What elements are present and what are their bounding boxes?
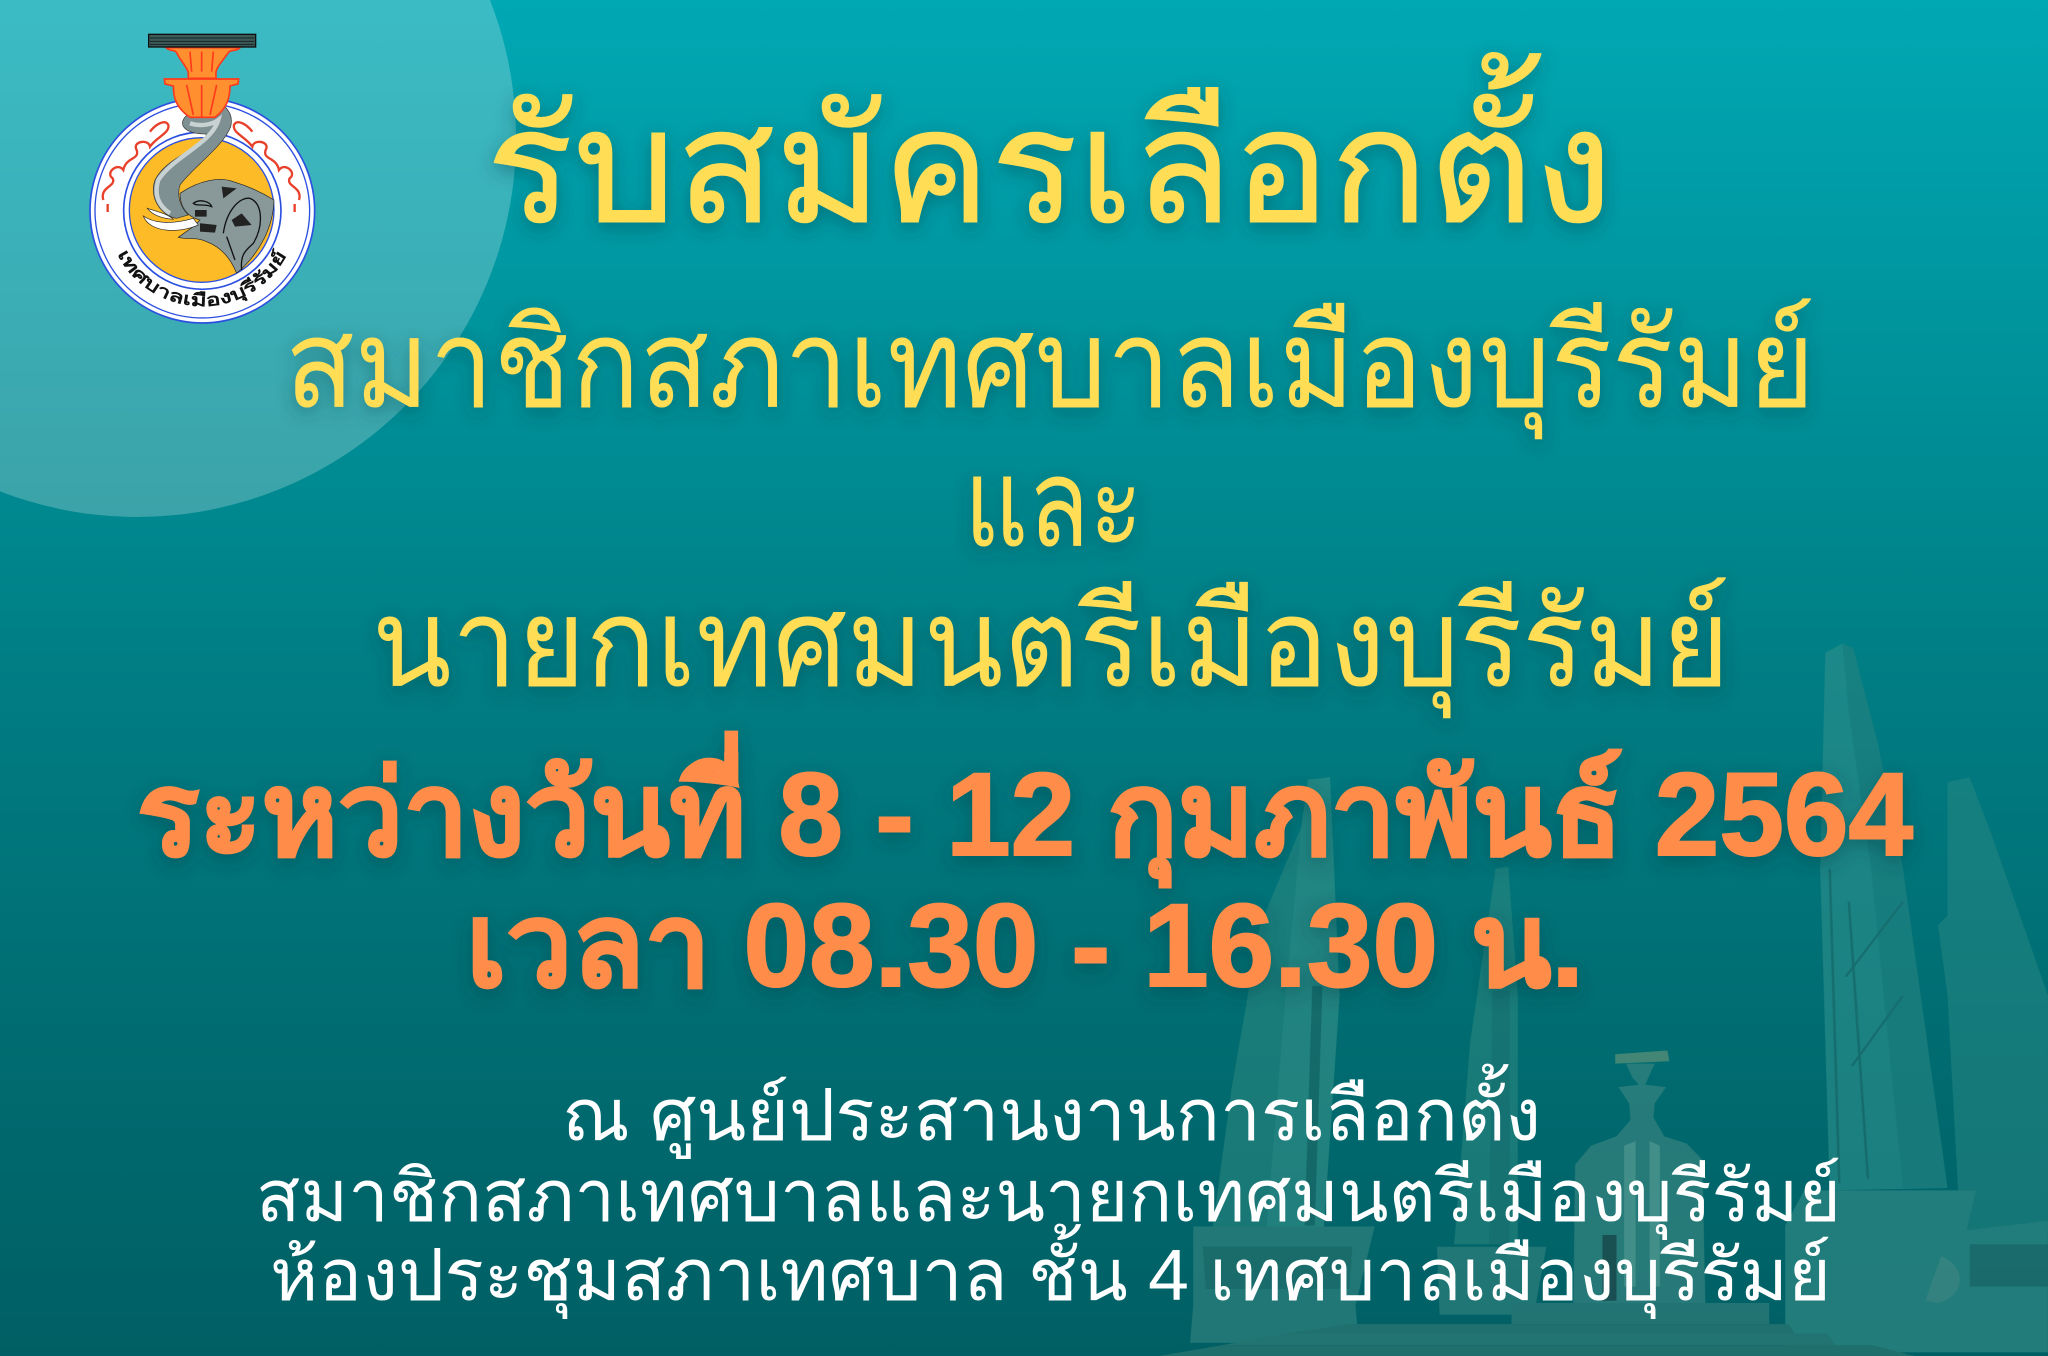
logo: yellow disc: [124, 132, 281, 289]
logo: elephant head: [178, 179, 274, 273]
monument: middle base: [1437, 1247, 1546, 1315]
subtitle: and: และ: [964, 435, 1143, 573]
municipality logo: [89, 34, 316, 324]
venue line 1: ณ ศูนย์ประสานงานการเลือกตั้ง: [562, 1063, 1541, 1159]
monument: steps: [1158, 1303, 1916, 1356]
monument: central turret: [1573, 1050, 1706, 1315]
date and time block: [137, 732, 1913, 1012]
decorative corner circle: [0, 0, 516, 517]
logo: white ring: [90, 98, 315, 323]
monument: far right wing: [1938, 777, 2048, 1230]
title: รับสมัครเลือกตั้ง: [486, 52, 1613, 256]
heading block: [285, 52, 1815, 719]
monument: middle wing: [1454, 866, 1518, 1244]
date: ระหว่างวันที่ 8 - 12 กุมภาพันธ์ 2564: [137, 732, 1913, 888]
logo: municipality name: เทศบาลเมืองบุรีรัมย์: [118, 247, 286, 307]
venue line 2: สมาชิกสภาเทศบาลและนายกเทศมนตรีเมืองบุรีรัมย์: [256, 1157, 1841, 1240]
logo: lotus pedestal: [164, 48, 240, 117]
logo: elephant eye marks: [195, 187, 252, 233]
time: เวลา 08.30 - 16.30 น.: [466, 880, 1584, 1012]
subtitle: mayor: นายกเทศมนตรีเมืองบุรีรัมย์: [372, 575, 1730, 719]
venue line 3: ห้องประชุมสภาเทศบาล ชั้น 4 เทศบาลเมืองบุรีรัมย์: [270, 1223, 1831, 1319]
monument: right base: [1785, 1190, 2048, 1352]
venue block: [256, 1063, 1841, 1319]
monument: left base: [1190, 1226, 1375, 1343]
democracy monument background: [1158, 643, 2048, 1356]
monument: left wing: [1212, 777, 1340, 1230]
subtitle: council: สมาชิกสภาเทศบาลเมืองบุรีรัมย์: [285, 296, 1815, 440]
logo: top bar: [149, 34, 256, 47]
logo: elephant tusks: [143, 208, 198, 230]
logo: elephant trunk: [153, 107, 231, 218]
monument: right wing: [1820, 643, 1947, 1190]
logo: elephant details: [193, 198, 260, 270]
logo: scroll ornaments: [103, 122, 300, 212]
